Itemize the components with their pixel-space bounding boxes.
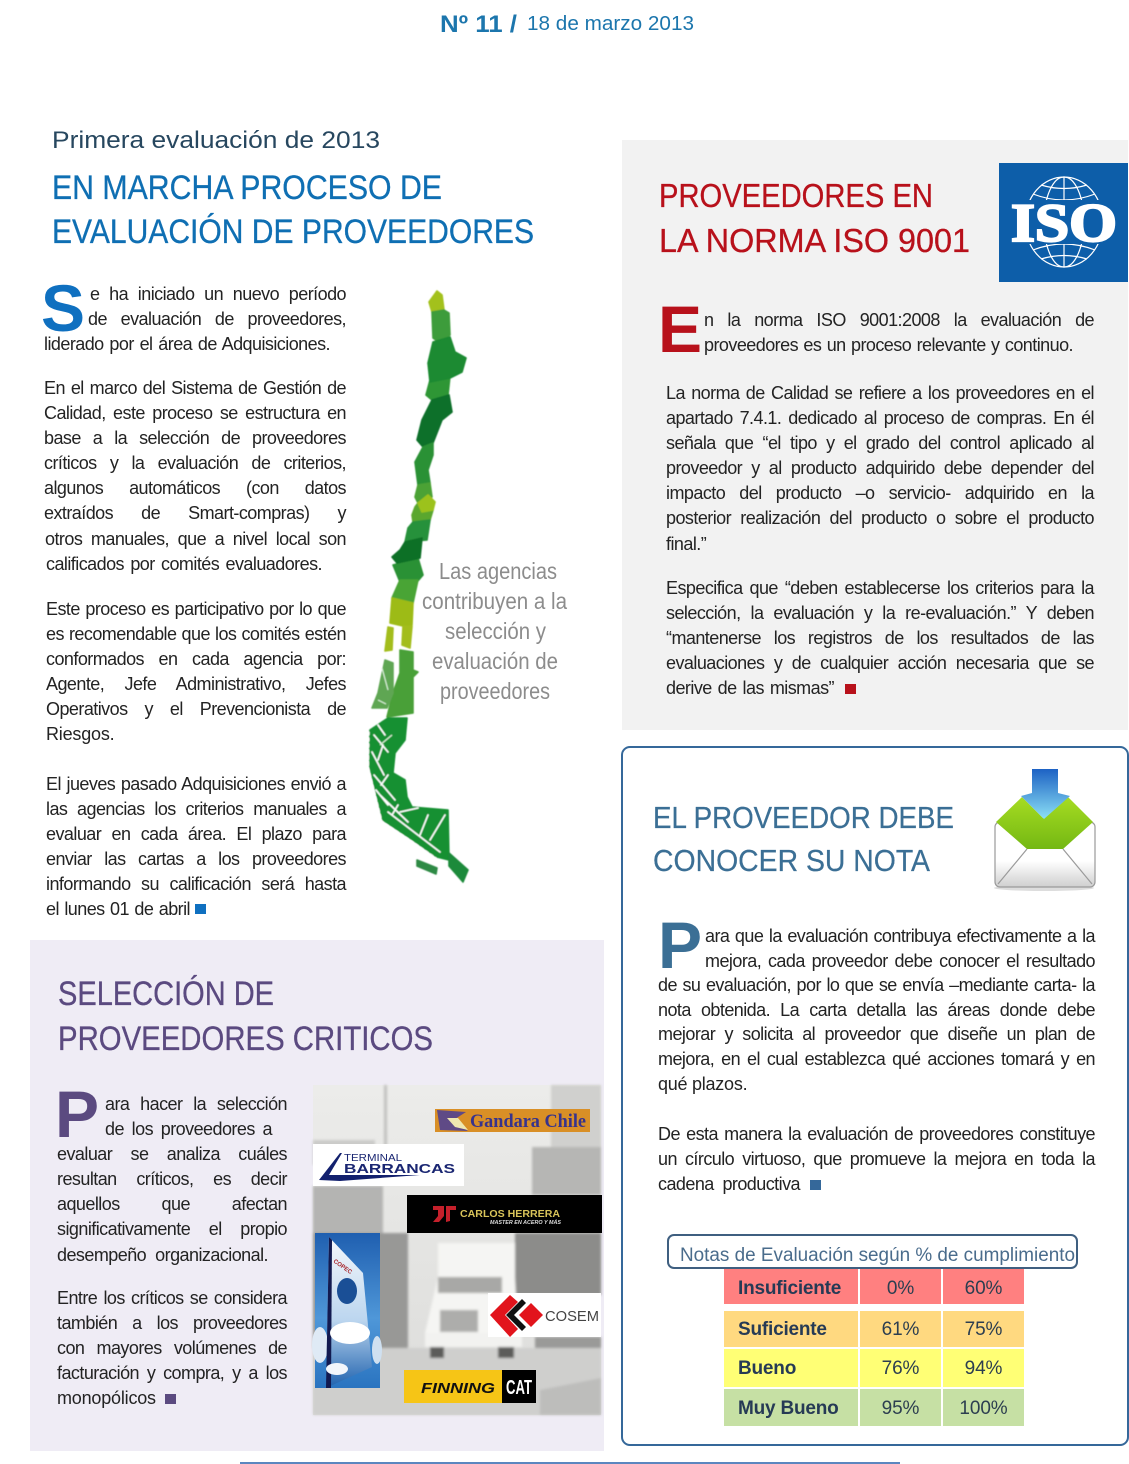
- header: issue number and date: [440, 11, 694, 38]
- caption beside map: proveedores: [440, 678, 550, 704]
- supplier text: virtuous circle: [658, 1124, 1096, 1194]
- heading: suppliers in ISO 9001: [659, 177, 970, 259]
- ISO text: criteria: evaluaciones y de cualquier acción necesaria que se: [666, 653, 1094, 673]
- heading: suppliers in ISO 9001: PROVEEDORES EN: [659, 177, 933, 214]
- row: Muy Bueno: 95%: [882, 1398, 919, 1419]
- critical text: monopolies: facturación y compra, y a los: [57, 1363, 287, 1383]
- row: Muy Bueno: 100%: [959, 1398, 1008, 1419]
- header: issue number and date: 18 de marzo 2013: [527, 13, 694, 35]
- table title: Notas de Evaluación según % de cumplimiento: [680, 1245, 1075, 1266]
- heading: suppliers in ISO 9001: LA NORMA ISO 9001: [659, 222, 970, 259]
- logo: Gandara Chile: Gandara Chile: [470, 1111, 586, 1132]
- article text: management system: críticos y la evaluación de criterios,: [44, 453, 346, 473]
- row: Insuficiente: [724, 1269, 1024, 1304]
- supplier logos collage: [312, 1084, 602, 1416]
- ISO text: criteria: [666, 578, 1094, 698]
- caption beside map: [422, 558, 568, 704]
- row: Bueno: [724, 1349, 1024, 1387]
- caption beside map: Las agencias: [439, 558, 557, 584]
- icon: ISO logo: ISO: [1011, 193, 1117, 253]
- ISO text: criteria: Especifica que “deben establecerse los criterios para la: [666, 578, 1094, 598]
- ISO text: purchasing section: final.”: [666, 534, 706, 554]
- critical text: selection criteria: desempeño organizacional.: [57, 1245, 268, 1265]
- critical text: monopolies: monopólicos: [57, 1388, 156, 1408]
- row: Insuficiente: Insuficiente: [738, 1278, 841, 1299]
- panel: ISO 9001: [622, 140, 1128, 730]
- ISO text: criteria: “mantenerse los registros de los resultados de las: [666, 628, 1094, 648]
- logo: Finning CAT: CAT: [506, 1377, 532, 1399]
- article text: introduction: liderado por el área de Adquisiciones.: [44, 334, 330, 354]
- drop cap E: E: [658, 292, 702, 366]
- table: score bands: [724, 1269, 1024, 1426]
- caption beside map: evaluación de: [432, 648, 558, 674]
- heading: supplier must know score: CONOCER SU NOTA: [653, 843, 930, 878]
- article text: participation: Riesgos.: [46, 724, 114, 744]
- heading: supplier must know score: EL PROVEEDOR DEBE: [653, 800, 954, 835]
- ISO intro text: [704, 310, 1094, 355]
- article text: participation: conformados en cada agencia por:: [46, 649, 346, 669]
- caption beside map: contribuyen a la: [422, 588, 567, 614]
- kicker: first evaluation of 2013: Primera evaluación de 2013: [52, 127, 380, 154]
- end mark red: [845, 684, 856, 694]
- logo: Carlos Herrera: CARLOS HERRERA: [460, 1208, 560, 1220]
- ISO text: purchasing section: proveedor y al producto adquirido debe depender del: [666, 458, 1094, 478]
- supplier text: virtuous circle: un círculo virtuoso, que promueve la mejora en toda la: [658, 1149, 1095, 1169]
- article text: introduction: [44, 284, 346, 354]
- supplier text: feedback letter: mejora, en el cual establezca qué acciones tomará y en: [658, 1049, 1095, 1069]
- article text: deadline: las agencias los criterios manuales a: [46, 799, 346, 819]
- main heading: EN MARCHA PROCESO DE: [52, 169, 442, 207]
- critical text: selection criteria: de los proveedores a: [105, 1119, 272, 1139]
- ISO text: purchasing section: posterior realización del producto o sobre el producto: [666, 508, 1094, 528]
- critical text: selection criteria: significativamente el propio: [57, 1219, 287, 1239]
- supplier text: feedback letter: mejorar y solicita al proveedor que diseñe un plan de: [658, 1024, 1095, 1044]
- article text: participation: Este proceso es participativo por lo que: [46, 599, 346, 619]
- ISO text: purchasing section: La norma de Calidad se refiere a los proveedores en el: [666, 383, 1094, 403]
- logo: Copec tower: [312, 1233, 382, 1388]
- end mark blue: [195, 904, 206, 914]
- table title: [667, 1234, 1078, 1269]
- critical text: monopolies: también a los proveedores: [57, 1313, 287, 1333]
- supplier text: feedback letter: de su evaluación, por lo que se envía –mediante carta- la: [658, 975, 1095, 995]
- ISO text: purchasing section: [666, 383, 1094, 554]
- supplier text: feedback letter: mejora, cada proveedor debe conocer el resultado: [705, 951, 1095, 971]
- drop cap S: S: [41, 271, 85, 345]
- article text: deadline: el lunes 01 de abril: [46, 899, 190, 919]
- logo: Finning CAT: FINNING: [421, 1380, 495, 1397]
- icon: envelope with arrow: [994, 769, 1096, 891]
- heading: critical suppliers: PROVEEDORES CRITICOS: [58, 1020, 433, 1058]
- bottom rule: [240, 1462, 900, 1464]
- icon: ISO logo: [999, 163, 1128, 282]
- end mark purple: [165, 1394, 176, 1404]
- ISO intro text: n la norma ISO 9001:2008 la evaluación de: [704, 310, 1094, 330]
- critical text: selection criteria: aquellos que afectan: [57, 1194, 287, 1214]
- article text: management system: otros manuales, que a nivel local son: [45, 529, 346, 549]
- article text: introduction: e ha iniciado un nuevo período: [90, 284, 346, 304]
- article text: deadline: evaluar en cada área. El plazo para: [46, 824, 346, 844]
- logo: Terminal Barrancas: [313, 1144, 464, 1186]
- supplier text: feedback letter: qué plazos.: [658, 1074, 747, 1094]
- main heading: [52, 169, 534, 251]
- supplier text: feedback letter: ara que la evaluación contribuya efectivamente a la: [705, 926, 1095, 946]
- supplier text: feedback letter: nota obtenida. La carta detalla las áreas donde debe: [658, 1000, 1095, 1020]
- logo: Cosem: COSEM: [545, 1308, 599, 1325]
- ISO text: purchasing section: apartado 7.4.1. dedicado al proceso de compras. En él: [666, 408, 1094, 428]
- logo: Copec tower: COPEC: [332, 1259, 353, 1276]
- row: Suficiente: [724, 1311, 1024, 1347]
- logo: Terminal Barrancas: TERMINAL: [344, 1152, 402, 1164]
- logo: Finning CAT: [404, 1370, 536, 1403]
- article text: participation: Agente, Jefe Administrativo, Jefes: [46, 674, 346, 694]
- ISO text: purchasing section: señala que “el tipo y el grado del control aplicado al: [666, 433, 1094, 453]
- ISO intro text: proveedores es un proceso relevante y continuo.: [704, 335, 1073, 355]
- supplier text: virtuous circle: cadena productiva: [658, 1174, 800, 1194]
- ISO text: purchasing section: impacto del producto –o servicio- adquirido en la: [666, 483, 1094, 503]
- article text: management system: algunos automáticos (con datos: [44, 478, 346, 498]
- header: issue number and date: Nº 11 /: [440, 11, 517, 38]
- article text: deadline: [46, 774, 346, 919]
- row: Muy Bueno: Muy Bueno: [738, 1398, 839, 1419]
- drop cap P: P: [658, 908, 702, 982]
- critical text: selection criteria: evaluar se analiza cuáles: [57, 1144, 287, 1164]
- drop cap P: P: [55, 1077, 99, 1151]
- ISO text: criteria: derive de las mismas”: [666, 678, 834, 698]
- critical text: selection criteria: resultan críticos, es decir: [57, 1169, 287, 1189]
- article text: management system: [44, 378, 346, 574]
- critical text: monopolies: con mayores volúmenes de: [57, 1338, 287, 1358]
- map of Chile: [368, 290, 470, 884]
- heading: critical suppliers: SELECCIÓN DE: [58, 975, 274, 1013]
- panel: critical suppliers selection: [30, 940, 604, 1451]
- row: Suficiente: 75%: [965, 1319, 1002, 1340]
- row: Suficiente: Suficiente: [738, 1319, 827, 1340]
- article text: management system: En el marco del Sistema de Gestión de: [44, 378, 346, 398]
- article text: deadline: El jueves pasado Adquisiciones envió a: [46, 774, 346, 794]
- row: Insuficiente: 60%: [965, 1278, 1002, 1299]
- row: Muy Bueno: [724, 1389, 1024, 1426]
- row: Bueno: 94%: [965, 1358, 1002, 1379]
- article text: introduction: de evaluación de proveedores,: [88, 309, 346, 329]
- article text: management system: extraídos de Smart-compras) y: [44, 503, 346, 523]
- supplier text: virtuous circle: De esta manera la evaluación de proveedores constituye: [658, 1124, 1095, 1144]
- row: Insuficiente: 0%: [887, 1278, 914, 1299]
- caption beside map: selección y: [445, 618, 546, 644]
- article text: deadline: enviar las cartas a los proveedores: [46, 849, 346, 869]
- critical text: selection criteria: [57, 1094, 288, 1265]
- critical text: monopolies: [57, 1288, 288, 1408]
- end mark blue-grey: [810, 1180, 821, 1190]
- logo: Carlos Herrera: [407, 1195, 602, 1233]
- critical text: selection criteria: ara hacer la selección: [105, 1094, 287, 1114]
- row: Bueno: Bueno: [738, 1358, 796, 1379]
- article text: participation: Operativos y el Prevencionista de: [46, 699, 346, 719]
- heading: critical suppliers: [58, 974, 433, 1058]
- article text: participation: es recomendable que los comités estén: [46, 624, 346, 644]
- article text: management system: calificados por comités evaluadores.: [46, 554, 322, 574]
- row: Bueno: 76%: [882, 1358, 919, 1379]
- supplier text: feedback letter: [658, 926, 1096, 1094]
- photo background: [313, 1085, 601, 1415]
- panel: supplier must know score: [621, 746, 1129, 1446]
- logo: Carlos Herrera: MASTER EN ACERO Y MÁS: [490, 1219, 562, 1226]
- ISO text: criteria: selección, la evaluación y la re-evaluación.” Y deben: [666, 603, 1094, 623]
- article text: management system: Calidad, este proceso se estructura en: [44, 403, 346, 423]
- critical text: monopolies: Entre los críticos se considera: [57, 1288, 287, 1308]
- logo: Cosem: [488, 1293, 601, 1337]
- row: Suficiente: 61%: [882, 1319, 919, 1340]
- heading: supplier must know score: [653, 800, 954, 878]
- main heading: EVALUACIÓN DE PROVEEDORES: [52, 213, 534, 251]
- article text: deadline: informando su calificación será hasta: [46, 874, 346, 894]
- article text: management system: base a la selección de proveedores: [44, 428, 346, 448]
- article text: participation: [46, 599, 346, 744]
- logo: Terminal Barrancas: BARRANCAS: [344, 1161, 455, 1176]
